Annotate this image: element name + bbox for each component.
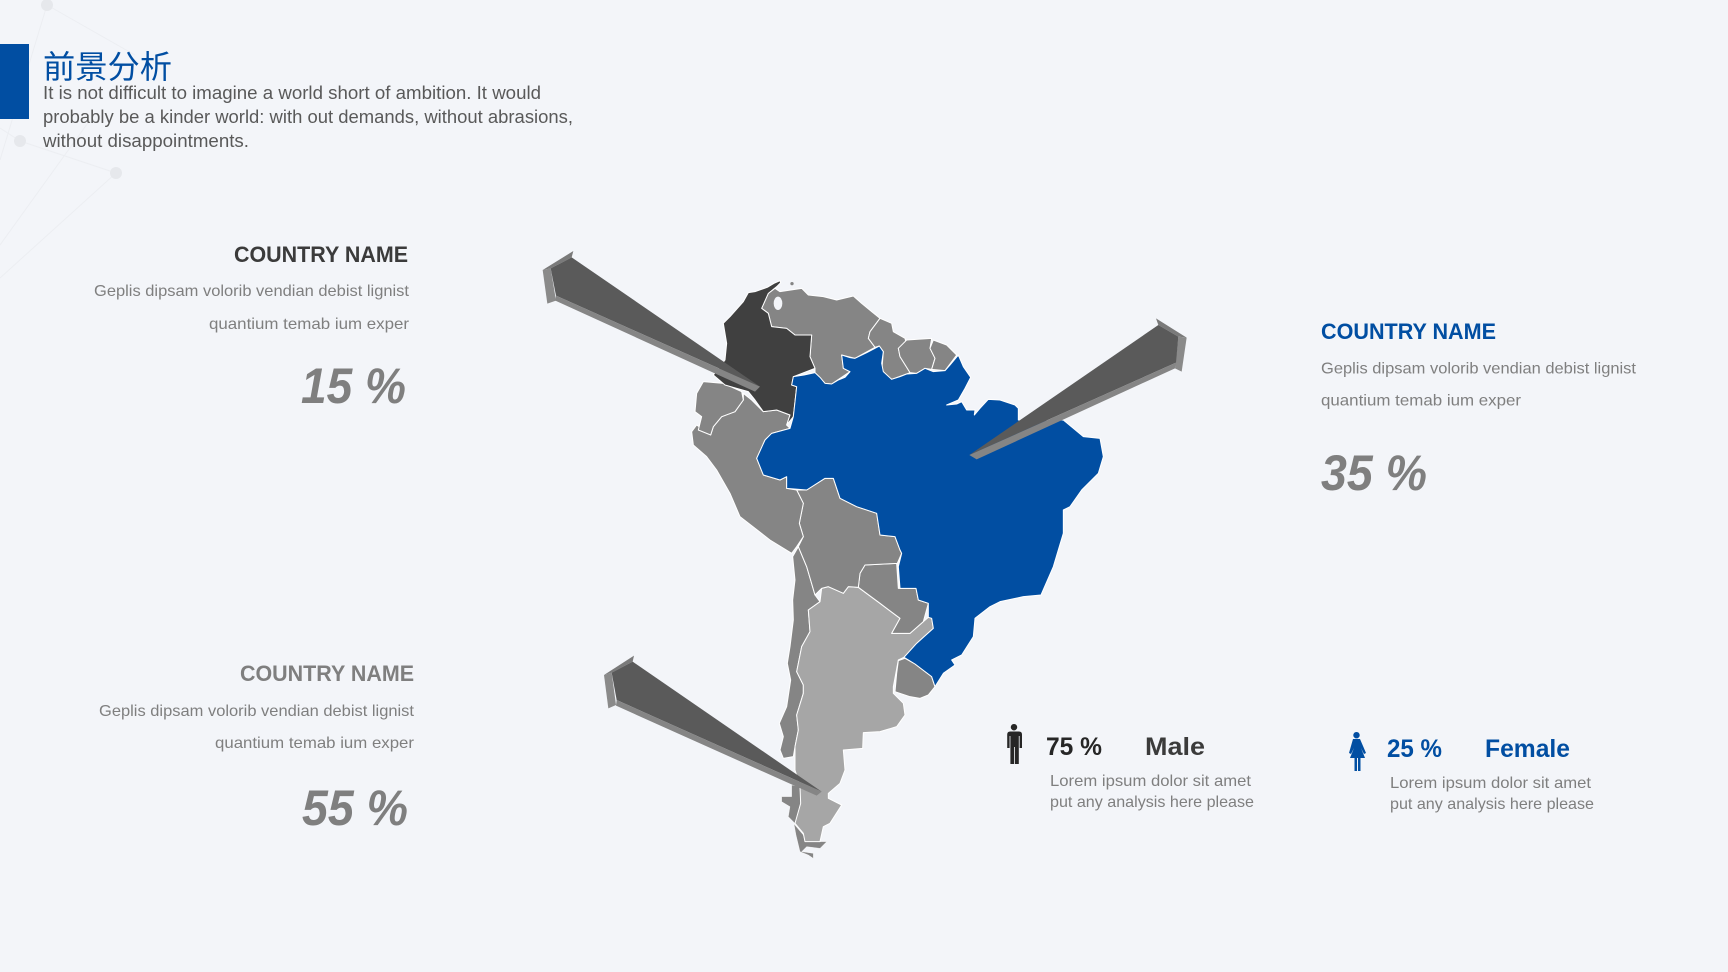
pointer: Brazil bbox=[969, 318, 1187, 459]
percentage: 75 % bbox=[1046, 733, 1102, 761]
island bbox=[790, 282, 794, 285]
description: put any analysis here please bbox=[1390, 796, 1594, 813]
intro text bbox=[42, 83, 573, 151]
pointer: Argentina bbox=[604, 656, 822, 796]
Colombia bbox=[713, 281, 815, 425]
title: 前景分析 bbox=[43, 42, 172, 88]
Uruguay bbox=[895, 658, 935, 698]
pointer: Colombia bbox=[543, 251, 760, 392]
Venezuela bbox=[762, 288, 880, 384]
lake bbox=[774, 297, 782, 310]
intro text: It is not difficult to imagine a world short of ambition. It would bbox=[43, 83, 541, 103]
percentage: 25 % bbox=[1387, 735, 1442, 763]
description: put any analysis here please bbox=[1050, 794, 1254, 811]
description: Lorem ipsum dolor sit amet bbox=[1050, 773, 1252, 790]
panel: country right bbox=[1321, 319, 1637, 501]
Peru bbox=[692, 393, 803, 553]
description bbox=[1390, 775, 1594, 813]
panel: country bottom left bbox=[99, 661, 415, 836]
Guyana bbox=[868, 318, 910, 379]
description bbox=[94, 283, 410, 333]
description bbox=[1050, 773, 1254, 811]
description: Geplis dipsam volorib vendian debist lignist bbox=[1321, 360, 1637, 378]
percentage: 35 % bbox=[1321, 445, 1427, 501]
icon: male figure bbox=[1007, 724, 1022, 764]
description: quantium temab ium exper bbox=[1321, 392, 1522, 410]
heading: COUNTRY NAME bbox=[1321, 319, 1496, 344]
description: Geplis dipsam volorib vendian debist lignist bbox=[94, 283, 410, 300]
Suriname bbox=[898, 338, 935, 373]
icon: female figure bbox=[1349, 732, 1366, 771]
description: quantium temab ium exper bbox=[215, 735, 415, 752]
description bbox=[1321, 360, 1637, 410]
panel: female stat bbox=[1349, 732, 1594, 813]
map: South America bbox=[692, 281, 1103, 858]
Argentina bbox=[795, 587, 933, 842]
intro text: without disappointments. bbox=[42, 131, 249, 151]
Ecuador bbox=[695, 382, 743, 435]
Chile bbox=[779, 547, 827, 858]
heading: COUNTRY NAME bbox=[234, 242, 408, 267]
description: quantium temab ium exper bbox=[209, 316, 410, 333]
description: Lorem ipsum dolor sit amet bbox=[1390, 775, 1592, 792]
percentage: 55 % bbox=[302, 780, 408, 836]
label: Male bbox=[1145, 733, 1205, 761]
heading: COUNTRY NAME bbox=[240, 661, 414, 686]
Paraguay bbox=[858, 563, 928, 633]
percentage: 15 % bbox=[301, 358, 406, 414]
intro text: probably be a kinder world: with out demands, without abrasions, bbox=[43, 107, 573, 127]
Bolivia bbox=[797, 478, 902, 595]
Brazil bbox=[757, 346, 1103, 687]
description: Geplis dipsam volorib vendian debist lignist bbox=[99, 703, 415, 720]
accent bar bbox=[0, 44, 29, 119]
panel: country top left bbox=[94, 242, 410, 414]
label: Female bbox=[1485, 735, 1570, 763]
description bbox=[99, 703, 415, 752]
panel: male stat bbox=[1007, 724, 1254, 811]
French Guiana bbox=[930, 340, 957, 371]
